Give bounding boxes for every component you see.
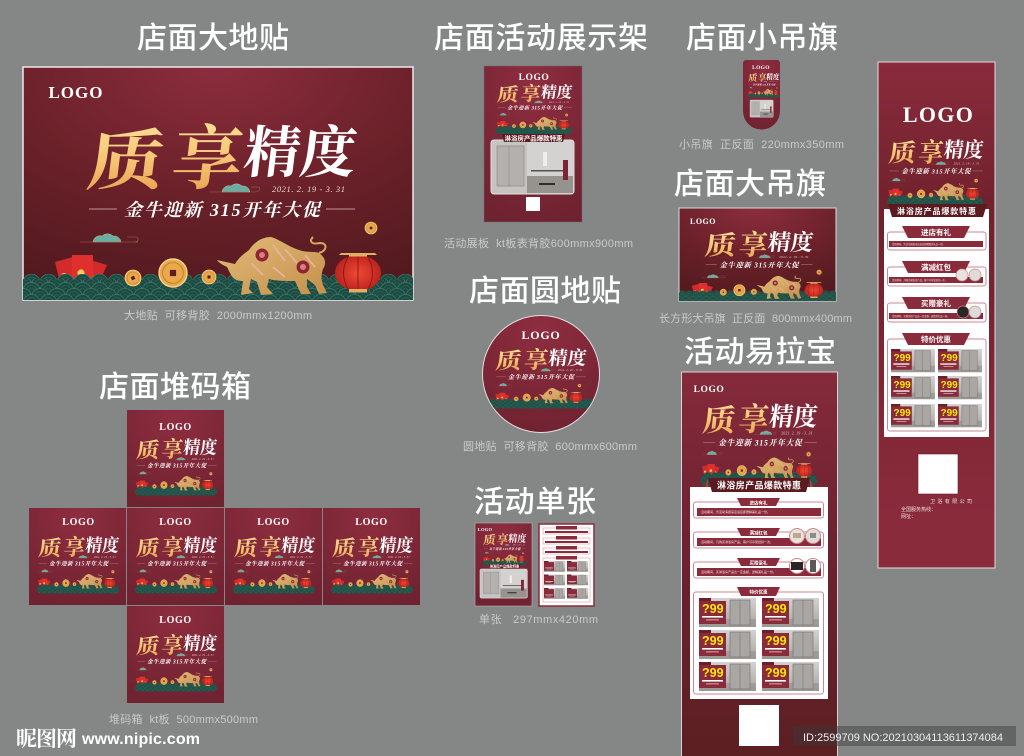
key visual: 2021. 2. 19 - 3. 31 — [513, 544, 525, 547]
product grid: ?99 — [702, 634, 724, 648]
section: 买赠豪礼: 活动期间，买淋浴房产品达一定金额，送精美礼品一份。 — [701, 569, 776, 574]
box face: right: 享 — [258, 530, 283, 562]
box face: centre: 质 — [135, 532, 162, 562]
logo: LOGO — [694, 385, 724, 395]
watermark: site logo — [16, 723, 200, 753]
banner: 淋浴房产品爆款特惠: 淋浴房产品爆款特惠 — [897, 206, 976, 216]
box face: centre: 精度 — [182, 531, 219, 557]
key visual: 享 — [523, 341, 550, 375]
box face: bottom: 精度 — [182, 629, 219, 655]
key visual title: 享 — [167, 103, 250, 204]
key visual title: 金牛迎新 315开年大促 — [124, 200, 323, 220]
product grid: ?99 — [765, 602, 787, 616]
caption: stacking box: 堆码箱 kt板 500mmx500mm — [109, 712, 258, 726]
product photo — [491, 140, 574, 194]
key visual: 2021. 2. 19 - 3. 31 — [549, 101, 569, 104]
logo: LOGO — [690, 217, 716, 226]
box face: right: LOGO — [257, 517, 290, 528]
key visual — [887, 133, 985, 206]
caption: leaflet: 单张 297mmx420mm — [479, 613, 598, 626]
watermark: ID bar — [793, 726, 1016, 746]
panel: main floor sticker — [23, 67, 413, 300]
product grid — [891, 349, 982, 427]
key visual: 金牛迎新 315开年大促 — [902, 167, 972, 176]
box face: back: LOGO — [355, 517, 388, 528]
key visual: 精度 — [942, 134, 985, 163]
key visual: 金牛迎新 315开年大促 — [718, 438, 803, 448]
caption: floor sticker: 大地贴 可移背胶 2000mmx1200mm — [124, 308, 312, 322]
box face: centre: LOGO — [159, 517, 192, 528]
product grid: ?99 — [765, 634, 787, 648]
key visual — [482, 530, 528, 565]
key visual: 质 — [482, 531, 497, 548]
section: 买赠豪礼 — [694, 558, 824, 578]
key visual: 质 — [748, 71, 758, 84]
caption: round sticker: 圆地贴 可移背胶 600mmx600mm — [463, 439, 637, 453]
box face: top — [127, 410, 224, 507]
watermark: site logo: 昵图网 — [16, 723, 77, 753]
box face: back: 精度 — [378, 531, 415, 557]
key visual: 享 — [519, 78, 543, 106]
illustration: waves, ox, lantern and coins — [23, 184, 413, 300]
panel: roll-up banner — [682, 372, 838, 756]
key visual: 金牛迎新 315开年大促 — [508, 373, 575, 381]
box face: top: 2021. 2. 19 - 3. 31 — [192, 458, 214, 461]
box face: top: 质 — [135, 434, 162, 464]
section: 进店有礼 — [694, 498, 824, 518]
section: 进店有礼 — [888, 226, 986, 250]
section: 特价优惠: 特价优惠 — [921, 334, 951, 344]
caption: small flag: 小吊旗 正反面 220mmx350mm — [679, 137, 844, 151]
product grid: ?99 — [940, 353, 958, 364]
key visual — [748, 70, 780, 97]
panel: large hanging flag — [679, 208, 836, 301]
product grid: ?99 — [702, 666, 724, 680]
watermark: ID bar: ID:2599709 NO:20210304113611374084 — [803, 732, 1003, 744]
key visual: 享 — [737, 393, 772, 440]
key visual — [496, 78, 574, 134]
heading: 店面小吊旗: 店面小吊旗 — [686, 22, 838, 55]
white content panel — [690, 487, 828, 699]
box face: centre — [127, 508, 224, 605]
product grid: ?99 — [894, 408, 911, 419]
heading: 店面活动展示架: 店面活动展示架 — [434, 22, 648, 55]
logo: LOGO — [478, 527, 493, 532]
key visual: 质 — [703, 226, 739, 263]
company details: 网址： — [901, 513, 916, 520]
key visual: 2021. 2. 19 - 3. 31 — [781, 431, 813, 436]
box face: left: 质 — [37, 532, 64, 562]
section: 满减红包 — [694, 528, 824, 548]
caption: display rack: 活动展板 kt板表背胶600mmx900mm — [444, 236, 633, 250]
product photo — [750, 100, 773, 117]
key visual — [679, 224, 836, 301]
heading: 店面大地贴: 店面大地贴 — [137, 22, 289, 55]
product grid: ?99 — [940, 380, 958, 391]
heading: 活动易拉宝: 活动易拉宝 — [684, 336, 836, 369]
section: 进店有礼: 进店有礼 — [921, 227, 951, 237]
section: 买赠豪礼: 活动期间，买淋浴房产品达一定金额，送精美礼品一份。 — [892, 314, 949, 318]
company details: 卫浴有限公司 — [930, 498, 972, 505]
key visual title: 2021. 2. 19 - 3. 31 — [272, 184, 345, 194]
box face: bottom: 2021. 2. 19 - 3. 31 — [192, 654, 214, 657]
key visual: 质 — [887, 134, 918, 169]
box face: left: 享 — [62, 530, 87, 562]
banner: 淋浴房产品爆款特惠 — [504, 134, 563, 142]
logo: LOGO — [519, 73, 549, 83]
company details — [901, 498, 972, 520]
section: 满减红包: 满减红包 — [921, 262, 951, 272]
key visual: 精度 — [766, 225, 816, 257]
key visual: 金牛迎新 315开年大促 — [753, 83, 776, 86]
key visual: 金牛迎新 315开年大促 — [489, 547, 521, 551]
QR placeholder — [526, 197, 540, 211]
section: 进店有礼: 活动期间，凭活动海报来店进店即赠精美礼品一份。 — [892, 242, 945, 246]
panel: round floor sticker — [482, 315, 600, 433]
box face: bottom: 享 — [160, 628, 185, 660]
heading: 店面大吊旗: 店面大吊旗 — [674, 168, 826, 201]
key visual: 精度 — [766, 72, 780, 83]
banner: 淋浴房产品爆款特惠: 淋浴房产品爆款特惠 — [717, 480, 801, 490]
section: 特价优惠 — [694, 587, 824, 694]
QR placeholder — [918, 454, 958, 494]
key visual: 2021. 2. 19 - 3. 31 — [770, 81, 778, 83]
box face: centre: 2021. 2. 19 - 3. 31 — [192, 556, 214, 559]
key visual title: 质 — [82, 108, 172, 203]
key visual: 2021. 2. 19 - 3. 31 — [954, 162, 980, 166]
panel: leaflet back — [539, 524, 594, 606]
key visual: 享 — [737, 224, 770, 263]
banner: 淋浴房产品爆款特惠 — [490, 564, 520, 568]
heading: 店面堆码箱: 店面堆码箱 — [99, 371, 251, 404]
box face: top: 享 — [160, 432, 185, 464]
key visual: 精度 — [540, 80, 574, 102]
box face: top: LOGO — [159, 422, 192, 433]
key visual: 金牛迎新 315开年大促 — [720, 260, 800, 269]
key visual: 享 — [496, 530, 509, 548]
section: 进店有礼: 活动期间，凭活动海报来店进店即赠精美礼品一份。 — [701, 509, 770, 514]
box face: back — [323, 508, 420, 605]
key visual: 质 — [700, 397, 739, 440]
box face: back: 金牛迎新 315开年大促 — [343, 561, 403, 568]
box face: back: 质 — [331, 532, 358, 562]
banner: 淋浴房产品爆款特惠 — [888, 204, 987, 217]
section: 满减红包 — [888, 261, 986, 286]
section: 买赠豪礼: 买赠豪礼 — [921, 298, 951, 308]
box face: right: 精度 — [280, 531, 317, 557]
box face: left: 2021. 2. 19 - 3. 31 — [94, 556, 116, 559]
panel: small hanging flag — [743, 60, 780, 130]
box face: back: 2021. 2. 19 - 3. 31 — [388, 556, 410, 559]
product photo — [480, 569, 527, 598]
offer strips — [543, 528, 590, 602]
box face: right: 金牛迎新 315开年大促 — [245, 561, 305, 568]
section: 买赠豪礼 — [888, 297, 986, 322]
key visual — [700, 393, 820, 486]
box face: bottom: LOGO — [159, 615, 192, 626]
box face: centre: 享 — [160, 530, 185, 562]
box face: top: 精度 — [182, 433, 219, 459]
key visual: 享 — [917, 133, 946, 169]
section: 进店有礼: 进店有礼 — [750, 500, 768, 506]
key visual: 2021. 2. 19 - 3. 31 — [558, 368, 583, 372]
offer tabs — [545, 526, 588, 560]
product grid — [699, 598, 819, 691]
box face: right: 质 — [233, 532, 260, 562]
box face: bottom — [127, 606, 224, 703]
box face: bottom: 质 — [135, 630, 162, 660]
banner: 淋浴房产品爆款特惠 — [705, 478, 813, 492]
product grid: ?99 — [702, 602, 724, 616]
section: 满减红包: 满减红包 — [750, 530, 768, 536]
box face: right: 2021. 2. 19 - 3. 31 — [290, 556, 312, 559]
key visual — [488, 348, 594, 408]
product grid — [544, 561, 588, 599]
box face: centre: 金牛迎新 315开年大促 — [147, 561, 207, 568]
white content panel — [884, 209, 989, 437]
logo: LOGO — [903, 102, 974, 127]
caption: large flag: 长方形大吊旗 正反面 800mmx400mm — [659, 311, 852, 325]
key visual: 享 — [758, 70, 767, 84]
key visual: 精度 — [768, 396, 820, 434]
product grid: ?99 — [940, 408, 958, 419]
logo: LOGO — [522, 328, 560, 342]
product grid: ?99 — [765, 666, 787, 680]
key visual: 2021. 2. 19 - 3. 31 — [779, 255, 809, 259]
key visual: 金牛迎新 315开年大促 — [507, 105, 563, 112]
watermark: site logo: www.nipic.com — [81, 731, 200, 748]
key visual title: 精度 — [240, 108, 362, 189]
section: 特价优惠: 特价优惠 — [750, 588, 768, 596]
box face: top: 金牛迎新 315开年大促 — [147, 463, 207, 470]
key visual title — [82, 103, 363, 220]
section: 买赠豪礼: 买赠豪礼 — [750, 560, 768, 566]
logo: LOGO — [48, 83, 104, 102]
box face: bottom: 金牛迎新 315开年大促 — [147, 659, 207, 666]
panel: leaflet front — [475, 523, 532, 606]
heading: 活动单张: 活动单张 — [474, 486, 596, 519]
QR placeholder — [739, 705, 779, 746]
logo: LOGO — [752, 65, 770, 71]
key visual: 精度 — [508, 530, 528, 545]
box face: left — [29, 508, 126, 605]
panel: stacking box — [29, 410, 420, 703]
company details: 全国服务热线： — [901, 506, 936, 513]
panel: display rack — [484, 66, 582, 222]
key visual: 质 — [494, 343, 524, 375]
key visual: 质 — [496, 80, 521, 106]
product grid: ?99 — [894, 380, 911, 391]
box face: left: LOGO — [62, 517, 95, 528]
box face: left: 金牛迎新 315开年大促 — [49, 561, 109, 568]
box face: right — [225, 508, 322, 605]
section: 特价优惠 — [888, 333, 986, 431]
key visual: 精度 — [547, 343, 588, 370]
heading: 店面圆地贴: 店面圆地贴 — [469, 275, 621, 308]
box face: left: 精度 — [84, 531, 121, 557]
section: 满减红包: 活动期间，凡购买淋浴房产品，客户可享受抵扣一次。 — [892, 278, 947, 282]
product grid: ?99 — [894, 353, 911, 364]
box face: back: 享 — [356, 530, 381, 562]
panel: tall banner — [878, 62, 995, 568]
section: 满减红包: 活动期间，凡购买淋浴房产品，客户可享受抵扣一次。 — [701, 539, 773, 544]
